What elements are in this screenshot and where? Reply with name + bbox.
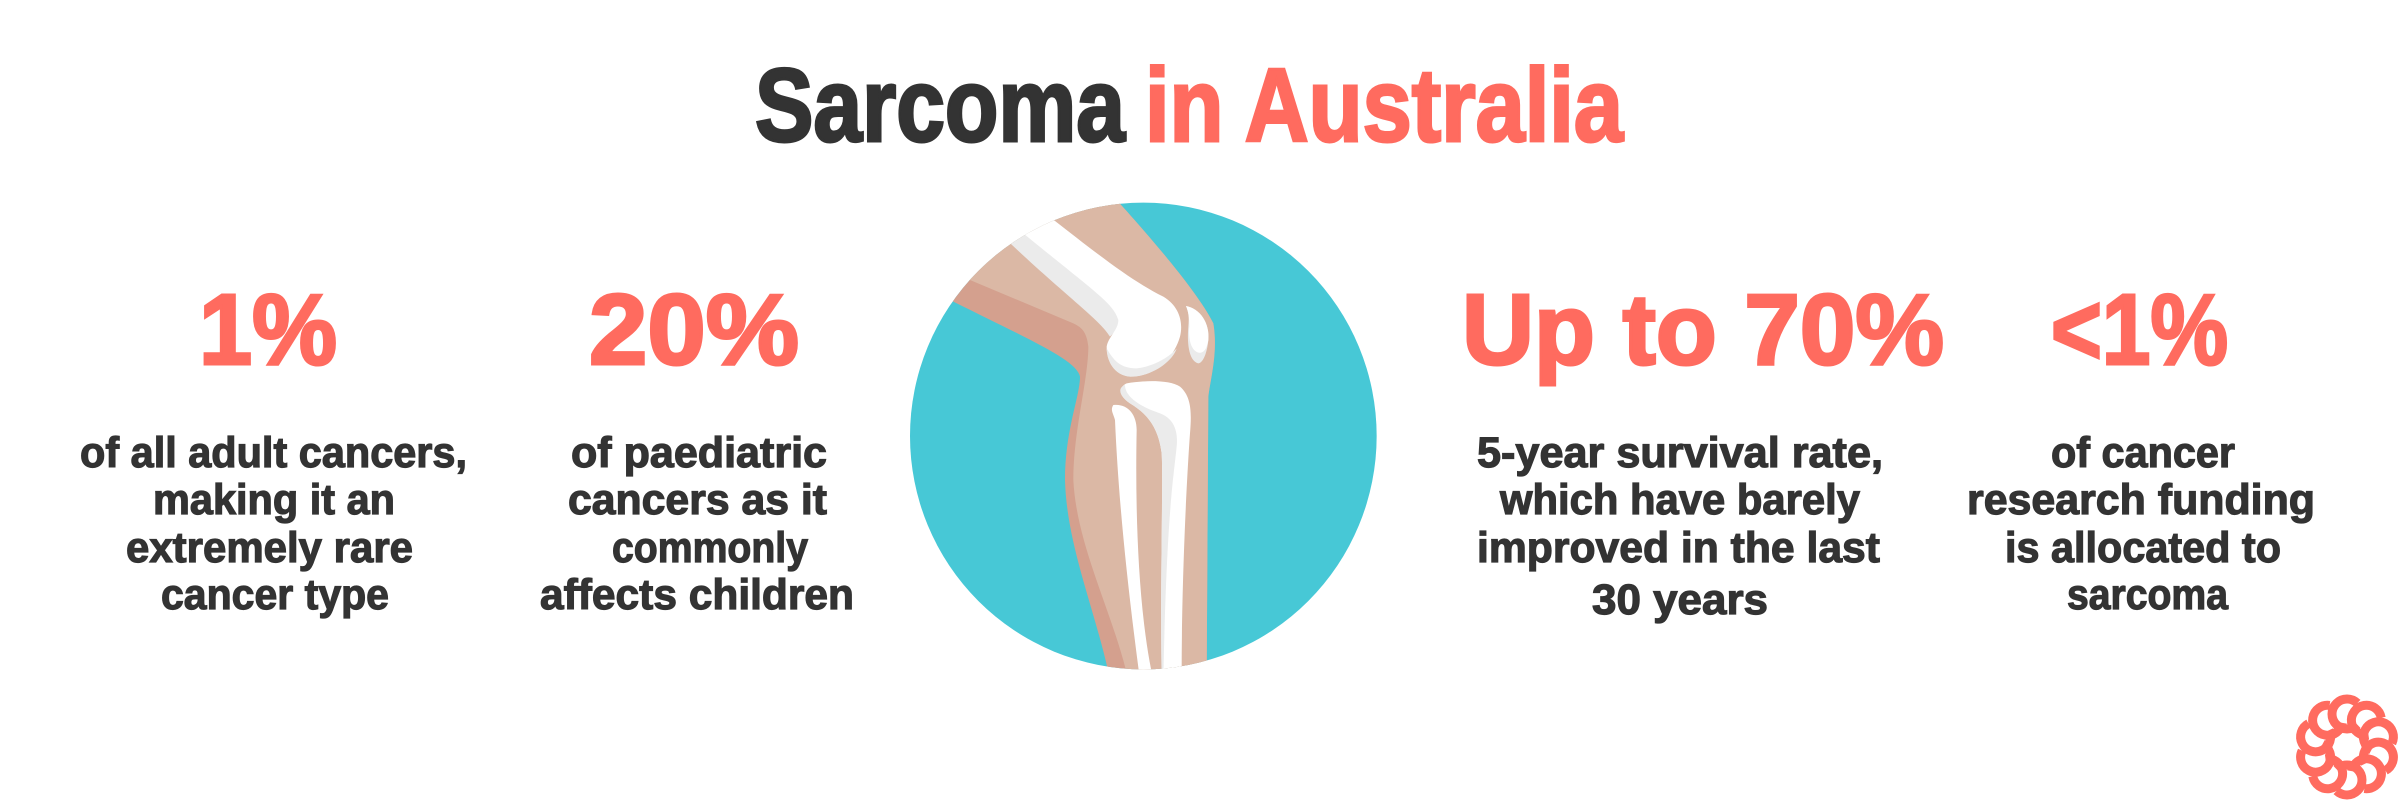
stat: 20%: affects children xyxy=(540,571,854,619)
stat: 1%: 1% xyxy=(199,274,337,386)
stat: <1%: is allocated to xyxy=(2005,524,2281,572)
stat: 1%: cancer type xyxy=(161,571,389,619)
stat: up to 70%: 5-year survival rate, xyxy=(1477,429,1883,477)
stat: 20% xyxy=(540,274,854,619)
title: Sarcoma xyxy=(755,48,1126,164)
stat: up to 70%: which have barely xyxy=(1499,476,1860,524)
title: in Australia xyxy=(1145,48,1624,164)
stat: 20%: cancers as it xyxy=(568,476,827,524)
stat: <1% xyxy=(1967,274,2315,619)
logo xyxy=(2297,699,2397,795)
stat: 20%: 20% xyxy=(589,274,799,386)
illustration: knee in teal circle xyxy=(910,202,1377,670)
title xyxy=(755,48,1624,164)
stat: <1%: research funding xyxy=(1967,476,2315,524)
stat: up to 70% xyxy=(1462,274,1944,624)
stat: 20%: commonly xyxy=(612,524,808,572)
stat: 1%: extremely rare xyxy=(126,524,413,572)
stat: <1%: <1% xyxy=(2051,274,2228,386)
stat: 1% xyxy=(80,274,467,619)
stat: up to 70%: 30 years xyxy=(1592,576,1768,624)
stat: up to 70%: improved in the last xyxy=(1477,524,1880,572)
stat: 20%: of paediatric xyxy=(571,429,827,477)
stat: up to 70%: Up to 70% xyxy=(1462,274,1944,386)
stat: <1%: of cancer xyxy=(2051,429,2235,477)
stat: 1%: making it an xyxy=(153,476,395,524)
stat: 1%: of all adult cancers, xyxy=(80,429,467,477)
stat: <1%: sarcoma xyxy=(2067,571,2229,619)
